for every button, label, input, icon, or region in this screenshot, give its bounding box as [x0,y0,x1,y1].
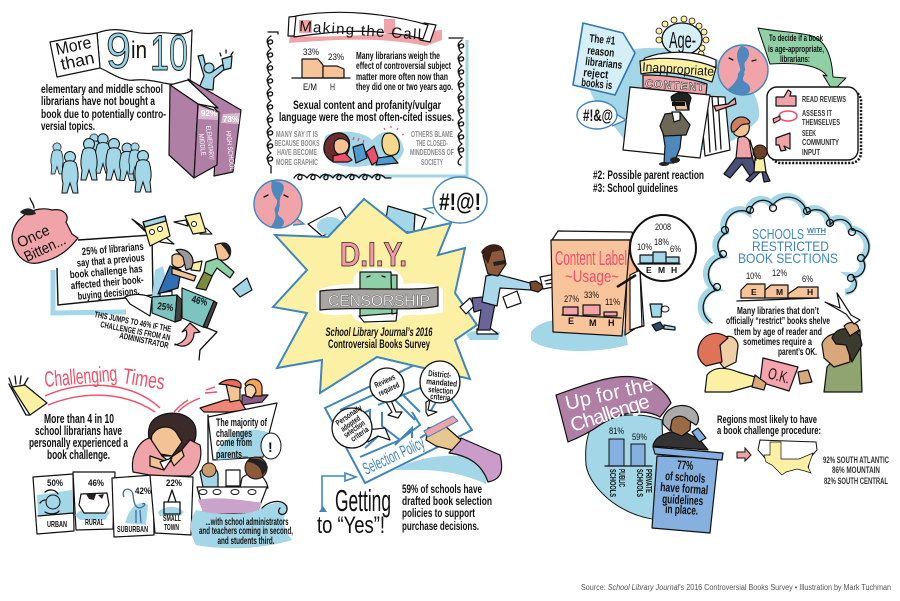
banner: 10 [150,25,188,81]
figures on books [152,242,234,298]
podium: of schools [665,469,706,486]
text: more than 4 in 10: school librarians have [35,424,122,438]
panel: regions [717,414,889,486]
heading: RESTRICTED [752,238,829,254]
bar chart: public and private [605,426,654,497]
sail: come from [216,437,252,449]
text: others blame: SOCIETY [421,158,443,167]
thought cloud [701,196,869,323]
bar chart: public and private: SCHOOLS [635,469,645,497]
bar chart: current usage: M [589,318,596,328]
callout: the #1 reason: The #1 [589,33,616,48]
bar chart: 33 and 23 percent: 33% [303,47,319,57]
star burst [273,199,477,393]
ribbon heading: Making the Call [299,18,422,44]
icon: hand with pen [424,416,502,482]
blocks: 25 and 46 percent [152,288,217,328]
bubble: grawlix [424,177,487,223]
bar chart: restricted: 12% [772,268,787,279]
list: methods: INPUT [802,147,821,157]
magnifier: 2008 chart: M [658,265,665,275]
text: reasons two and three [593,170,704,195]
maze document [325,360,472,483]
icon: open book [9,376,47,415]
text: to decide [768,33,824,65]
sail [208,403,277,487]
callout: the #1 reason: books is [581,77,613,92]
text: sexual content: language were the most often-cited issues. [279,110,454,124]
text: 59 percent: drafted book selection [402,496,492,508]
bar chart: current usage: 33% [584,290,599,300]
arrow [737,448,751,461]
map: United States [758,440,817,475]
text: to decide: librarians: [780,54,810,65]
caption: jumps to 46 percent: THIS JUMPS TO 46% IF THE [94,309,172,334]
podium: 77% [677,458,694,473]
text: many say: HAVE BECOME [277,148,317,157]
banner [50,23,192,85]
callout box: book challenge has [69,263,143,281]
panel: content label usage [531,215,696,351]
passengers [200,433,281,488]
text: with school administrators: ...with school administrators [206,516,289,528]
list: methods: COMMUNITY [802,137,839,147]
icon: magnifier [773,111,797,123]
bar chart: 33 and 23 percent: H [330,82,335,92]
figure: woman and man with OK slip [698,293,862,392]
text: 59 percent [402,484,492,533]
card: small town: 22% [166,478,182,488]
marquee sign [640,16,716,95]
list: methods: ASSESS IT [802,108,833,118]
heading: WITH [807,226,826,235]
text: to decide: To decide if a book [769,33,823,44]
subtitle: School Library Journal’s 2016 [326,327,433,339]
banner: 9 [106,23,131,79]
list: methods: THEMSELVES [802,117,840,127]
bubble: district-mandated [420,361,460,416]
panel: age-inappropriate content [573,16,861,195]
panel: challenging times [9,361,293,548]
text: many libraries: parent’s OK. [778,346,817,358]
magnifier: 2008 chart: H [671,265,677,275]
bar chart: public and private: SCHOOLS [608,469,618,497]
boat scene [191,379,293,548]
text: many libraries: Many libraries that don’t [737,305,819,317]
bubble: personally adopted: adopted [339,414,362,434]
bar chart: restricted: E [751,287,757,297]
book [551,231,644,336]
bar chart: public and private: 59% [632,432,647,442]
figure: speaker [653,406,708,450]
bar chart: restricted [737,268,819,301]
heading: Challenging [43,361,118,392]
marquee sign: CONTENT [645,78,705,94]
icon: censored book with band [316,268,443,324]
podium: in place. [665,502,699,518]
panel: schools with restricted sections [698,196,869,392]
bar chart: 33 and 23 percent: 23% [328,52,344,62]
card: urban [33,474,74,534]
callout box [53,235,153,313]
text: many libraries [726,305,830,358]
magnifier: 2008 chart: E [646,265,652,275]
icon: brush handle [664,325,675,330]
apple heading [12,198,78,266]
panel: selection policy [317,361,502,539]
icon: megaphone [776,133,790,151]
text: many say: MANY SAY IT IS [276,130,318,139]
caption: jumps to 46 percent: ADMINISTRATOR [119,330,170,350]
magnifier: 2008 chart: 18% [654,237,669,247]
subtitle: Controversial Books Survey [328,339,430,351]
text: regions most likely: a book challenge procedure: [717,425,821,437]
text: with school administrators: and teachers coming in second, [199,525,293,537]
bar chart: current usage: E [568,316,574,326]
text: regions most likely: Regions most likely to have [717,414,817,426]
bar chart: public and private: PUBLIC [617,469,627,487]
text: 59 percent: policies to support [402,508,475,520]
callout: the #1 reason: reason [587,45,615,60]
bubble: kissing faces [718,45,768,95]
magnifier: 2008 chart: 6% [670,244,681,254]
callout: the #1 reason: reject [583,67,609,82]
card: rural [73,472,115,530]
green arrow [758,28,846,91]
bar chart: current usage: 27% [564,294,579,304]
icon: crowd of students [51,134,151,193]
podium: have formal [660,480,709,497]
bar chart: restricted: 6% [802,274,813,285]
figure: woman and man with OK slip: O.K. [766,365,792,388]
banner: in [131,37,147,64]
bubble: personally adopted: criteria [349,425,371,444]
blue blob under policy [395,456,487,484]
heading: Times [121,363,167,395]
heading: BOOK SECTIONS [738,250,838,266]
cards: community types [33,472,193,537]
card: urban: URBAN [47,519,67,529]
text: librarians weigh: they did one or two years ago. [356,81,453,93]
text: others blame: MINDEDNESS OF [410,148,454,157]
hull [197,487,267,514]
sail: challenges [216,428,252,440]
text: elementary and middle school: book due to potentially contro- [41,107,166,121]
text: sexual content [279,98,454,124]
text: reasons two and three: #2: Possible parent reaction [593,170,704,182]
bubble: kissing faces [254,180,304,228]
book: Content Label [555,248,627,270]
text: many say: MORE GRAPHIC [276,158,318,167]
blue blob [531,319,628,351]
title: D.I.Y.: D.I.Y. [340,236,407,274]
list: methods: SEEK [802,128,817,138]
card: rural: 46% [88,478,104,488]
bubble: grawlix: #!@! [439,189,481,216]
sail: parents... [216,449,248,461]
text: elementary and middle school [41,82,166,133]
books: 92 and 73 percent [169,79,241,178]
text: 59 percent: purchase decisions. [402,521,479,533]
label: selection policy: Selection Policy [360,433,428,479]
callout box: 25% of librarians [81,241,144,258]
card: suburban: SUBURBAN [117,524,148,534]
bubble: district-mandated: mandated [426,376,458,389]
text: many say: BECAUSE BOOKS [274,139,320,148]
text: elementary and middle school: elementary and middle school [41,82,163,96]
text: many say [274,130,320,167]
marquee sign: Inappropriate [642,59,715,79]
list: region percentages: 86% MOUNTAIN [832,465,880,475]
icon: thumbs up [776,90,796,106]
text: librarians weigh: matter more often now than [356,71,448,83]
text: more than 4 in 10: book challenge. [47,448,110,462]
book with tough guy [623,87,736,166]
panel: once bitten [12,198,252,360]
callout box: say that a previous [76,252,145,270]
magnifier: 2008 chart: 2008 [655,222,671,232]
text: sexual content: Sexual content and profanity/vulgar [293,98,441,112]
icon: two readers arguing [323,126,404,167]
text: others blame: OTHERS BLAME [411,130,453,139]
heading: SCHOOLS [752,226,804,243]
books: 92 and 73 percent: ELEMENTARY/ [204,125,215,160]
figure: man handing label [460,244,559,340]
arrows [125,294,217,360]
books: 92 and 73 percent: 73% [223,115,239,124]
text: with school administrators [199,516,293,547]
text: to decide: is age-appropriate, [768,44,824,55]
books: 92 and 73 percent: MIDDLE [197,133,206,156]
caption: jumps to 46 percent: CHALLENGE IS FROM AN [100,319,171,343]
callout box: affected their book- [70,274,144,292]
bubble: district-mandated: criteria [430,391,451,403]
bar chart: public and private: PRIVATE [644,469,654,493]
icon: censored book with band: CENSORSHIP [328,293,430,310]
panel: up for the challenge [556,373,723,533]
marquee sign: Age- [669,27,696,53]
bubble: personally adopted: Personally [334,403,364,428]
passengers: ! [268,439,273,455]
box: how librarians decide [767,87,861,163]
heading [43,361,217,412]
ribbon heading [288,12,442,46]
blocks: 25 and 46 percent: 46% [190,294,209,309]
bar chart: restricted: M [776,287,783,297]
panel: more than 9 in 10 [41,23,241,193]
text: 59 percent: 59% of schools have [402,484,482,496]
icon: cup [650,304,669,317]
bubble: reviews required: Reviews [373,372,397,390]
heading [738,226,838,266]
speech bubble: grawlix: #!&@ [583,106,613,125]
card: small town: SMALL [163,513,181,523]
text: many libraries: officially “restrict” books shelve [726,315,830,327]
blue backdrop [585,48,759,150]
waves [191,503,292,548]
podium [652,447,723,533]
bubble: personally adopted: selection [342,418,367,440]
panel: making the call [267,12,467,180]
banner heading: Challenge [568,390,653,437]
bubble: personally adopted [332,403,390,448]
speech bubble: grawlix [577,101,626,129]
heading: getting to yes: Getting [335,483,391,518]
banner heading [556,373,671,442]
panel: center title [254,177,559,393]
icons: peeking books [308,206,426,236]
text: many libraries: them by age of reader and [734,326,822,338]
magnifier: 2008 chart [617,215,696,287]
bubble: reviews required [370,368,404,418]
text: librarians weigh [356,50,453,93]
text: many libraries: sometimes require a [743,336,812,348]
text: elementary and middle school: librarians have not bought a [41,94,155,108]
text: others blame: THE CLOSED- [416,139,448,148]
text: more than 4 in 10: More than 4 in 10 [44,412,114,426]
callout: the #1 reason [573,23,635,95]
list: region percentages [823,455,889,486]
bubble: district-mandated: District- [428,368,452,380]
card: urban: 50% [47,478,63,488]
banner: More [54,33,93,59]
magnifier: 2008 chart: 10% [637,242,652,252]
text: more than 4 in 10 [29,412,129,462]
heading: getting to yes [317,473,391,539]
icons: flying books [132,213,252,297]
text: reasons two and three: #3: School guidelines [593,183,678,195]
subtitle [326,327,433,351]
text: more than 4 in 10: personally experienced a [29,436,129,450]
callout box: buying decisions. [77,285,140,303]
bar chart: 33 and 23 percent [292,47,350,92]
icon: brush [652,322,664,331]
books: 92 and 73 percent: 92% [201,109,217,118]
text: librarians weigh: effect of controversial subject [356,60,451,72]
text: librarians weigh: Many librarians weigh the [356,50,440,62]
caption: jumps to 46 percent [94,309,172,350]
sail: The majority of [216,417,267,429]
bar chart: current usage [562,290,621,328]
text: elementary and middle school: versial topics. [41,119,95,133]
callout: the #1 reason: librarians [585,56,623,72]
list: methods [802,94,846,157]
podium: guidelines [662,492,704,508]
card: rural: RURAL [85,517,104,527]
icon: reader with raised book [198,50,233,90]
banner: than [59,48,96,74]
apple heading: Bitten... [22,232,69,266]
bar chart: current usage: 11% [605,297,620,307]
card: small town [150,475,193,535]
bar chart: restricted: H [807,287,813,297]
bubble: district-mandated: selection [428,384,454,396]
wave swirl [262,501,287,514]
card: suburban: 42% [135,486,151,496]
blocks: 25 and 46 percent: 25% [157,301,174,314]
text: with school administrators: and students third. [218,535,275,547]
list: methods: READ REVIEWS [802,94,846,104]
book: ~Usage~ [565,267,619,286]
text: others blame [410,130,454,167]
curly frame [267,32,467,180]
bubble: reviews required: required [377,380,401,398]
bar chart: current usage: H [608,318,614,328]
card: small town: TOWN [164,522,179,532]
bar chart: restricted: 10% [746,271,761,282]
heading: getting to yes: to “Yes”! [317,512,385,539]
figure: worried librarian [132,413,201,476]
bar chart: 33 and 23 percent: E/M [303,82,317,92]
bar chart: public and private: 81% [609,426,624,436]
apple heading: Once [15,222,53,252]
people on top [200,379,268,412]
card: suburban [112,475,154,537]
books: 92 and 73 percent: HIGH SCHOOL [224,130,235,171]
text: regions most likely [717,414,821,437]
icon: mother and child [724,117,770,182]
blue blob [586,415,665,520]
banner heading: Up for the [563,373,656,415]
